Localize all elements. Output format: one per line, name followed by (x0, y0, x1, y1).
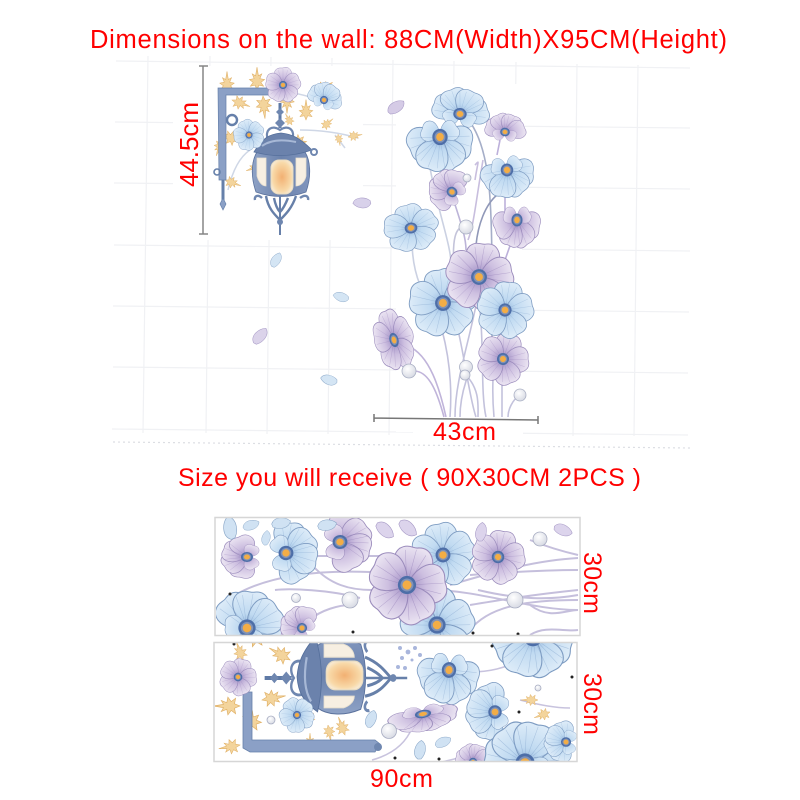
buds (402, 174, 526, 401)
label: 43cm: 43cm (433, 418, 496, 446)
label: 90cm: 90cm (370, 765, 433, 793)
lantern (264, 643, 408, 714)
blue flower left (227, 114, 271, 157)
blue flower right (302, 75, 349, 116)
sheet 1 (214, 516, 581, 636)
blue flowers lower (402, 265, 484, 344)
wall grid (112, 56, 690, 448)
bracket (214, 88, 272, 210)
flowers on lantern (263, 67, 303, 104)
dimension line: height (199, 66, 208, 234)
gold leaves (211, 67, 363, 191)
bracket (243, 692, 380, 752)
sheet 1 border (215, 518, 580, 636)
purple flowers (481, 109, 530, 144)
label: 44.5cm: 44.5cm (174, 102, 204, 187)
sheet 2 border (214, 642, 577, 762)
flower bouquet (365, 81, 543, 417)
lantern (252, 103, 317, 235)
title: Dimensions on the wall: 88CM(Width)X95CM(Height) (90, 26, 727, 54)
stems (408, 122, 520, 417)
small dots cluster (396, 646, 422, 670)
leaves (215, 643, 550, 754)
sheet 2 (213, 642, 578, 762)
sheet 2 artwork (215, 643, 576, 761)
falling petals (250, 99, 406, 388)
label: 30cm bottom: 30cm (578, 673, 606, 735)
label: 30cm top: 30cm (578, 552, 606, 614)
lantern decal (211, 67, 363, 235)
subtitle: Size you will receive ( 90X30CM 2PCS ) (178, 464, 641, 492)
white patches behind artwork (173, 66, 523, 436)
dimension line: width (374, 414, 538, 424)
vine (228, 90, 358, 190)
sheet 1 artwork (216, 518, 578, 635)
blue flowers (426, 81, 496, 132)
